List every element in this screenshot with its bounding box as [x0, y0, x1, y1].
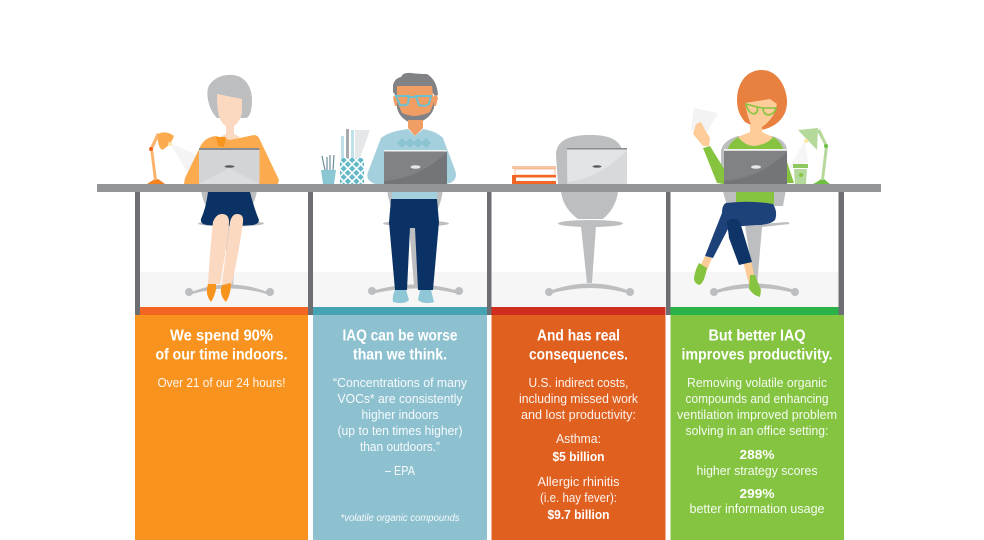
study description: Removing volatile organic	[687, 375, 827, 390]
allergic rhinitis cost: $9.7 billion	[548, 508, 610, 522]
desk top	[97, 184, 881, 192]
laptop: dark grey	[384, 150, 447, 184]
orange hair	[737, 70, 787, 130]
heading	[529, 328, 628, 364]
floor bands	[140, 272, 838, 307]
person four: woman in green	[691, 70, 830, 297]
stat: information usage: better information usage	[690, 501, 824, 516]
neck and chest	[738, 124, 773, 146]
heading: than we think.	[353, 346, 447, 364]
green shirt hem	[736, 192, 774, 204]
chair: person two	[368, 185, 463, 295]
cost intro: and lost productivity:	[521, 407, 636, 422]
stat: information usage	[690, 487, 824, 516]
EPA quote: (up to ten times higher)	[338, 423, 462, 438]
blue sweater	[367, 129, 456, 184]
beard	[397, 102, 434, 124]
cost intro: U.S. indirect costs,	[528, 375, 628, 390]
panel: IAQ can be worse	[313, 315, 487, 540]
heading: IAQ can be worse	[342, 328, 458, 344]
panel: time indoors	[135, 315, 308, 540]
green top	[722, 137, 794, 184]
heading: And has real	[537, 328, 620, 344]
allergic rhinitis cost: Allergic rhinitis	[538, 474, 620, 489]
bare ankles	[700, 256, 756, 284]
study description	[677, 375, 837, 438]
face	[397, 86, 434, 124]
empty desk: closed laptop and books	[512, 148, 627, 184]
heading: We spend 90%	[170, 328, 273, 344]
panel: real consequences	[492, 315, 666, 540]
face and neck	[217, 94, 242, 142]
raised arm	[703, 146, 726, 184]
study description: compounds and enhancing	[686, 391, 828, 406]
bare legs	[208, 214, 243, 284]
laptop: dark grey	[724, 149, 787, 184]
allergic rhinitis cost: (i.e. hay fever):	[540, 490, 617, 505]
EPA quote: than outdoors.”	[360, 439, 440, 454]
neck	[408, 120, 423, 136]
heading	[342, 328, 458, 364]
stat: strategy scores: higher strategy scores	[696, 463, 818, 478]
lamp beam	[787, 141, 808, 170]
stat: strategy scores: 288%	[740, 448, 774, 462]
heading: consequences.	[529, 346, 628, 364]
orange sweater	[184, 135, 279, 184]
cost intro	[519, 375, 638, 422]
footnote: *volatile organic compounds	[340, 513, 460, 524]
rolled plans in holder	[340, 129, 370, 184]
laptop: light grey	[567, 148, 627, 184]
green glasses	[746, 104, 776, 115]
asthma cost	[552, 431, 604, 464]
panel accent strips	[140, 307, 838, 315]
chair: person four	[710, 136, 799, 296]
raised hand	[693, 122, 710, 146]
EPA quote: “Concentrations of many	[333, 375, 467, 390]
study description: ventilation improved problem	[677, 407, 837, 422]
orange shoes	[207, 283, 231, 302]
chair: person one	[185, 150, 274, 296]
cost intro: including missed work	[519, 391, 638, 406]
heading: of our time indoors.	[156, 346, 288, 364]
skirt	[201, 192, 259, 226]
person two: man in blue	[321, 73, 456, 303]
desk legs	[135, 190, 844, 315]
EPA quote: – EPA	[385, 463, 415, 478]
blue shoes	[393, 290, 434, 303]
heading: But better IAQ	[708, 328, 806, 344]
ears	[393, 95, 438, 106]
stat: strategy scores	[696, 448, 818, 478]
panel: improves productivity	[670, 315, 844, 540]
allergic rhinitis cost	[538, 474, 620, 522]
hair: grey bob	[207, 75, 252, 118]
laptop: silver	[199, 148, 260, 184]
face	[745, 99, 777, 130]
hair: grey	[393, 73, 438, 97]
EPA quote: VOCs* are consistently	[338, 391, 463, 406]
navy crossed legs	[705, 202, 776, 265]
desk lamp: green	[798, 128, 830, 184]
EPA quote: higher indoors	[362, 407, 439, 422]
navy trousers	[389, 199, 439, 290]
stat: information usage: 299%	[740, 487, 774, 501]
glasses: teal	[396, 96, 431, 106]
EPA quote	[333, 375, 467, 478]
stack of books	[512, 166, 556, 184]
body text: Over 21 of our 24 hours!	[158, 375, 286, 390]
sheet of paper	[691, 108, 718, 134]
heading	[682, 328, 832, 364]
pencil cup	[321, 155, 336, 184]
heading	[156, 328, 288, 364]
sweater argyle	[397, 138, 431, 148]
person one: woman in orange	[147, 75, 279, 302]
asthma cost: $5 billion	[552, 450, 604, 464]
study description: solving in an office setting:	[686, 423, 828, 438]
green shoes	[694, 263, 761, 297]
desk lamp: orange	[147, 132, 197, 184]
sweater collar	[216, 137, 226, 147]
shirt hem	[392, 192, 437, 199]
heading: improves productivity.	[682, 346, 832, 364]
chair: empty seat	[545, 135, 634, 296]
coffee cup	[793, 164, 808, 184]
asthma cost: Asthma:	[556, 431, 601, 446]
